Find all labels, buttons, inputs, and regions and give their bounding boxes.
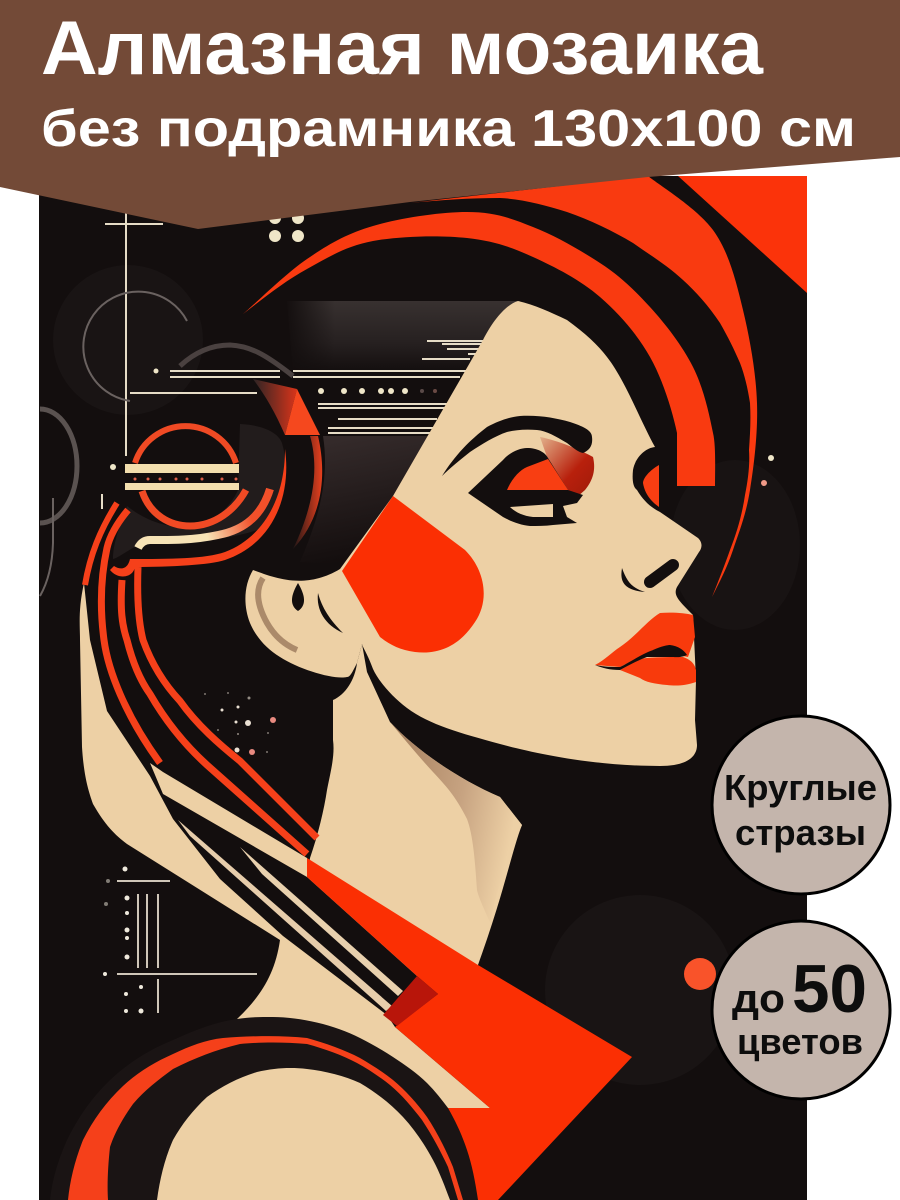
headphone outline arc bbox=[180, 345, 293, 376]
red collar bbox=[307, 858, 632, 1200]
badge: round rhinestones: Круглые bbox=[724, 767, 877, 808]
badge: up to 50 colours: 50 bbox=[792, 951, 867, 1027]
headset red ring bbox=[125, 426, 246, 526]
headset cream band bbox=[138, 489, 270, 548]
textured dark band behind face bbox=[287, 301, 520, 372]
headphone red triangle bbox=[285, 389, 320, 435]
red cheek bbox=[342, 496, 484, 653]
title line 1: Алмазная мозаика bbox=[41, 6, 764, 91]
headphone red crescent bbox=[293, 436, 322, 549]
top-right red wedge bbox=[678, 176, 807, 293]
nose wing bbox=[621, 568, 645, 592]
mouth line bbox=[595, 645, 687, 670]
circuit lines top bbox=[102, 176, 483, 509]
badge: round rhinestones: стразы bbox=[735, 812, 866, 853]
ear details bbox=[258, 578, 343, 650]
outer red hair band bbox=[410, 176, 757, 597]
lower circuit ornament bbox=[103, 866, 257, 1014]
collar fold bbox=[383, 976, 438, 1026]
red hair strands bbox=[85, 503, 317, 854]
headset red band bbox=[110, 449, 286, 576]
badge: up to 50 colours: цветов bbox=[737, 1021, 863, 1062]
red dot bbox=[684, 958, 716, 990]
circuit dots bbox=[110, 212, 774, 486]
far eye bbox=[643, 465, 659, 507]
lower lip bbox=[620, 657, 696, 686]
title line 2: без подрамника 130х100 см bbox=[41, 100, 856, 158]
neck bbox=[307, 644, 522, 976]
inner red hair band bbox=[243, 212, 715, 486]
faint background circles bbox=[40, 265, 800, 1085]
badge: up to 50 colours bbox=[712, 921, 890, 1099]
neck shadow bbox=[390, 722, 522, 922]
band left fade bbox=[285, 300, 335, 374]
eye shadow bbox=[540, 437, 594, 497]
poster artwork bbox=[39, 176, 807, 1200]
badge: round rhinestones bbox=[712, 716, 890, 894]
eyebrow bbox=[442, 416, 592, 476]
upper lip bbox=[595, 613, 695, 667]
nostril bbox=[650, 565, 673, 582]
cream hair stripes bbox=[178, 820, 403, 1011]
headphone shaded segment bbox=[253, 379, 297, 435]
red eyelid bbox=[507, 459, 568, 490]
eye white bbox=[510, 504, 553, 517]
cream hair wedge bbox=[150, 763, 307, 877]
dark hair panel bbox=[300, 436, 432, 565]
arc ornament bbox=[83, 292, 187, 401]
brown header banner bbox=[0, 0, 900, 229]
arm and back bbox=[80, 583, 490, 1150]
shoulder bbox=[50, 1017, 478, 1200]
badge: up to 50 colours: до bbox=[732, 977, 785, 1021]
face bbox=[245, 301, 702, 766]
particle dots bbox=[204, 692, 276, 755]
headphone grain shading bbox=[113, 424, 286, 559]
eye bbox=[468, 448, 583, 526]
